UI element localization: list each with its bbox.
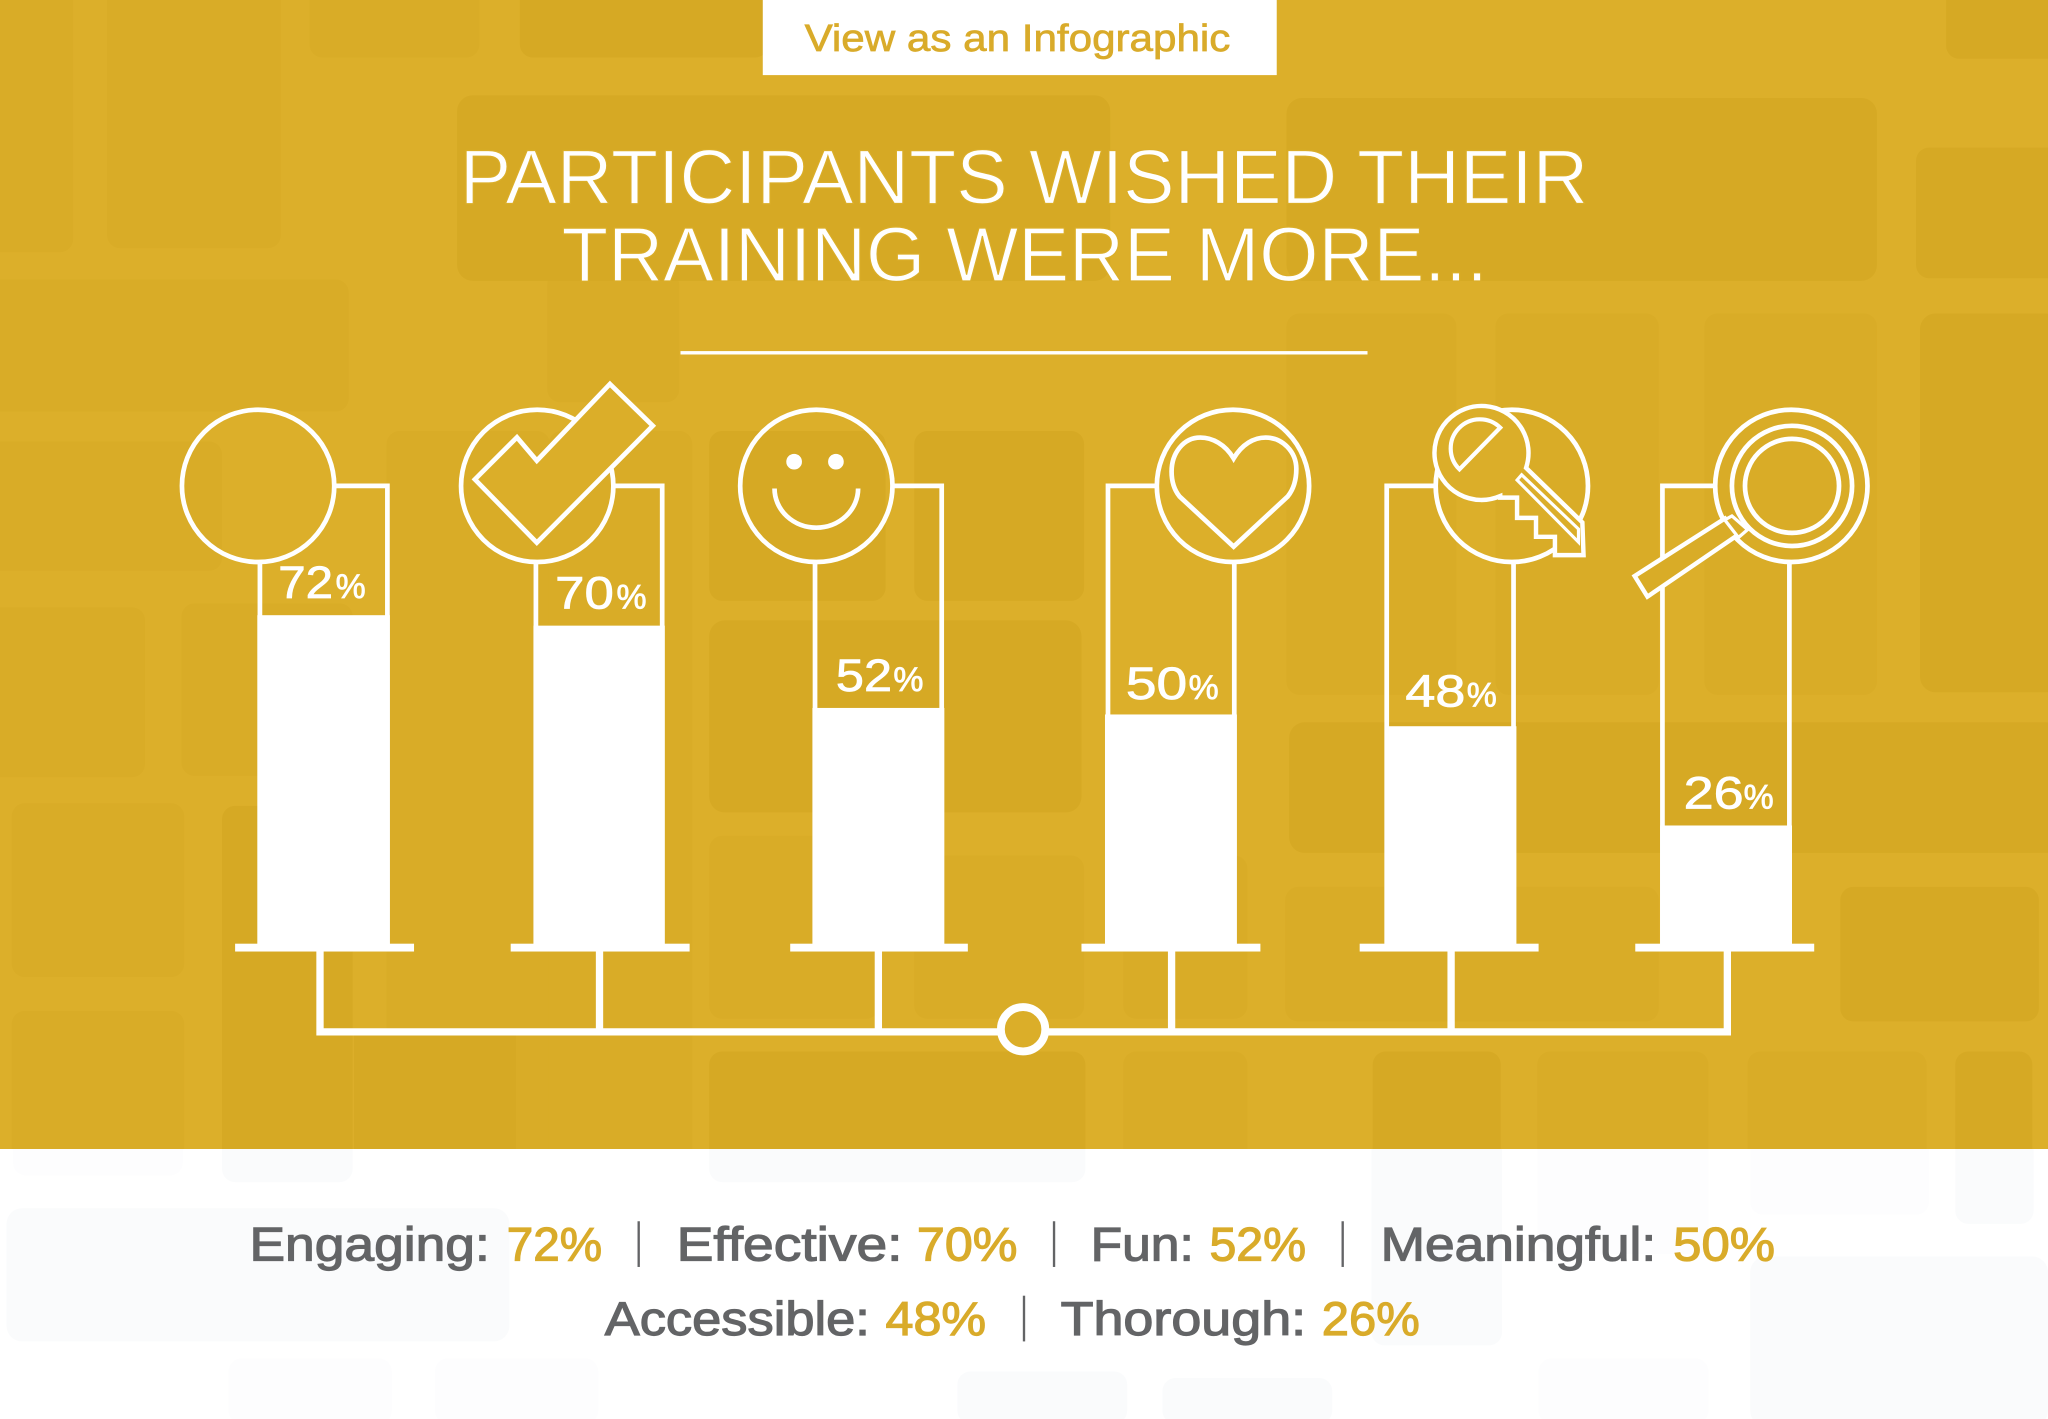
summary line 1: Effective: xyxy=(677,1217,903,1270)
summary line 2: 26% xyxy=(1322,1292,1420,1345)
value: 48%: 48 xyxy=(1405,666,1465,717)
icon: smiley xyxy=(740,410,892,562)
value: 72%: 72 xyxy=(278,557,333,608)
summary line 1: 52% xyxy=(1209,1217,1306,1270)
value: 48% xyxy=(1405,666,1497,717)
button: view as an infographic xyxy=(763,0,1277,75)
value: 52%: % xyxy=(893,661,923,699)
title: TRAINING WERE MORE... xyxy=(562,212,1488,298)
icon: magnifier xyxy=(1635,410,1867,597)
bar 3: fun 52% xyxy=(740,410,968,952)
icon: engaging circle xyxy=(182,410,334,562)
value: 26%: 26 xyxy=(1684,768,1744,819)
divider under title xyxy=(680,351,1368,354)
value: 52% xyxy=(836,650,923,701)
value: 70%: 70 xyxy=(555,568,614,619)
icon: check mark xyxy=(475,384,653,543)
summary line 1 xyxy=(249,1217,1775,1270)
value: 50%: 50 xyxy=(1126,658,1187,709)
bar 6: thorough 26% xyxy=(1635,410,1867,952)
summary line 1: Engaging: xyxy=(249,1217,490,1270)
icon: heart xyxy=(1157,410,1309,562)
summary line 1: Meaningful: xyxy=(1381,1217,1656,1270)
value: 26% xyxy=(1684,768,1774,819)
value: 52%: 52 xyxy=(836,650,892,701)
summary line 1: Fun: xyxy=(1091,1217,1194,1270)
value: 48%: % xyxy=(1467,677,1497,715)
title: PARTICIPANTS WISHED THEIR xyxy=(460,134,1588,220)
value: 70%: % xyxy=(616,579,647,617)
bar 5: accessible 48% xyxy=(1360,406,1588,952)
summary line 1: 72% xyxy=(507,1217,602,1270)
value: 50%: % xyxy=(1189,669,1219,707)
summary line 1: 70% xyxy=(917,1217,1017,1270)
bar 2: effective 70% xyxy=(461,384,690,952)
connector tree joining the bars xyxy=(320,948,1727,1051)
value: 72% xyxy=(278,557,366,608)
value: 26%: % xyxy=(1744,779,1774,817)
value: 50% xyxy=(1126,658,1219,709)
title xyxy=(460,134,1588,298)
button: view as an infographic: View as an Infographic xyxy=(805,18,1230,60)
summary line 2: 48% xyxy=(886,1292,986,1345)
summary line 2: Thorough: xyxy=(1061,1292,1306,1345)
summary line 2 xyxy=(605,1292,1420,1345)
bar 4: meaningful 50% xyxy=(1081,410,1309,952)
value: 70% xyxy=(555,568,647,619)
icon: key xyxy=(1434,406,1588,562)
summary line 1: 50% xyxy=(1673,1217,1775,1270)
summary line 2: Accessible: xyxy=(605,1292,870,1345)
bar 1: engaging 72% xyxy=(182,410,414,952)
value: 72%: % xyxy=(336,568,366,606)
